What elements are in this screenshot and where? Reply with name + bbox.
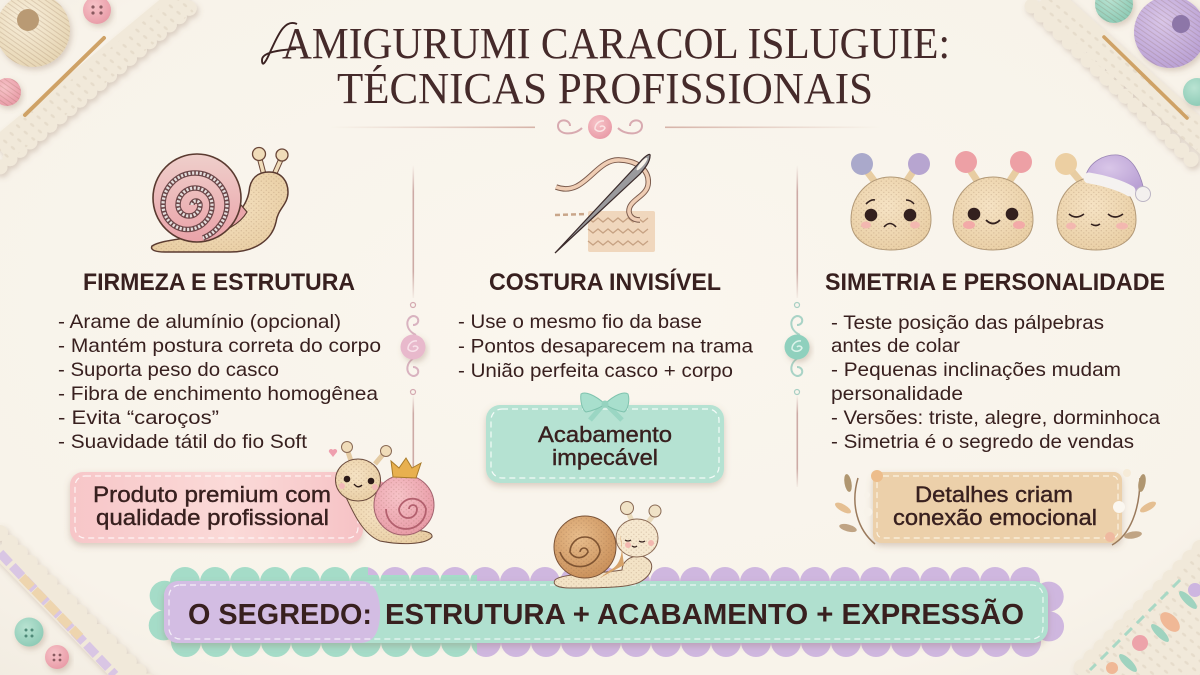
icon: floral sprigs — [833, 469, 1158, 545]
banner: o segredo — [163, 502, 1050, 643]
list: simetria e personalidade: - Teste posição das pálpebras — [831, 312, 1104, 334]
banner stitching — [169, 585, 1043, 639]
corner decoration: top right yarn and lace — [1032, 0, 1200, 168]
list: simetria e personalidade: - Versões: triste, alegre, dorminhoca — [831, 407, 1160, 429]
icon: pink spiral snail — [152, 148, 288, 252]
icon: mint bow — [581, 393, 629, 420]
banner main strip — [164, 581, 1048, 643]
panel: simetria e personalidade — [825, 151, 1165, 545]
face: sleepy with nightcap — [1055, 153, 1150, 250]
icon: snail with crown — [329, 442, 434, 544]
title divider ornament — [330, 115, 880, 139]
title: AMIGURUMI CARACOL ISLUGUIE: — [282, 19, 950, 68]
face: sad — [851, 153, 931, 250]
list: firmeza e estrutura: - Suavidade tátil do fio Soft — [58, 431, 308, 453]
heading: simetria e personalidade: SIMETRIA E PERSONALIDADE — [825, 269, 1165, 296]
title — [262, 19, 950, 113]
callout: acabamento impecável — [486, 393, 724, 483]
callout: detalhes criam conexão emocional: conexão emocional — [893, 505, 1097, 530]
list: costura invisível — [458, 311, 753, 382]
list: costura invisível: - Use o mesmo fio da base — [458, 311, 702, 333]
callout: produto premium: qualidade profissional — [96, 505, 329, 530]
list: simetria e personalidade: - Pequenas inclinações mudam — [831, 359, 1121, 381]
callout: acabamento impecável: impecável — [552, 445, 658, 470]
title: TÉCNICAS PROFISSIONAIS — [337, 64, 873, 113]
callout: produto premium — [70, 472, 363, 543]
list: simetria e personalidade: - Simetria é o segredo de vendas — [831, 431, 1134, 453]
banner crochet lace edging — [163, 582, 1050, 642]
icon: three snail faces — [851, 151, 1150, 250]
panel: firmeza e estrutura — [58, 148, 434, 544]
corner decoration: top left yarn and lace — [0, 0, 192, 167]
list: simetria e personalidade: personalidade — [831, 383, 963, 405]
corner decoration: bottom right embroidered lace — [1072, 548, 1200, 675]
banner purple label — [164, 581, 380, 643]
list: costura invisível: - Pontos desaparecem na trama — [458, 336, 753, 358]
divider: right with mint ornament — [784, 165, 810, 487]
banner text: O SEGREDO: — [188, 599, 372, 631]
list: simetria e personalidade — [831, 312, 1160, 453]
panel: costura invisível — [458, 154, 753, 483]
list: firmeza e estrutura: - Fibra de enchimento homogênea — [58, 383, 378, 405]
divider: left with pink ornament — [400, 165, 426, 487]
list: firmeza e estrutura: - Mantém postura correta do corpo — [58, 335, 381, 357]
callout: acabamento impecável: Acabamento — [538, 422, 672, 447]
heading: firmeza e estrutura: FIRMEZA E ESTRUTURA — [83, 269, 355, 296]
list: firmeza e estrutura: - Arame de alumínio (opcional) — [58, 311, 341, 333]
icon: needle and thread over crochet — [555, 154, 655, 253]
icon: tan snail resting on banner — [554, 502, 661, 588]
list: simetria e personalidade: antes de colar — [831, 335, 961, 357]
heading: costura invisível: COSTURA INVISÍVEL — [489, 268, 721, 296]
list: firmeza e estrutura: - Evita “caroços” — [58, 407, 219, 429]
corner decoration: bottom left lace and buttons — [0, 533, 150, 675]
list: firmeza e estrutura: - Suporta peso do casco — [58, 359, 279, 381]
callout: detalhes criam conexão emocional — [833, 469, 1158, 545]
list: firmeza e estrutura — [58, 311, 381, 453]
banner text: ESTRUTURA + ACABAMENTO + EXPRESSÃO — [385, 597, 1024, 631]
callout: detalhes criam conexão emocional: Detalhes criam — [915, 482, 1073, 507]
list: costura invisível: - União perfeita casco + corpo — [458, 360, 733, 382]
face: happy — [953, 151, 1033, 250]
callout: produto premium: Produto premium com — [93, 482, 331, 507]
